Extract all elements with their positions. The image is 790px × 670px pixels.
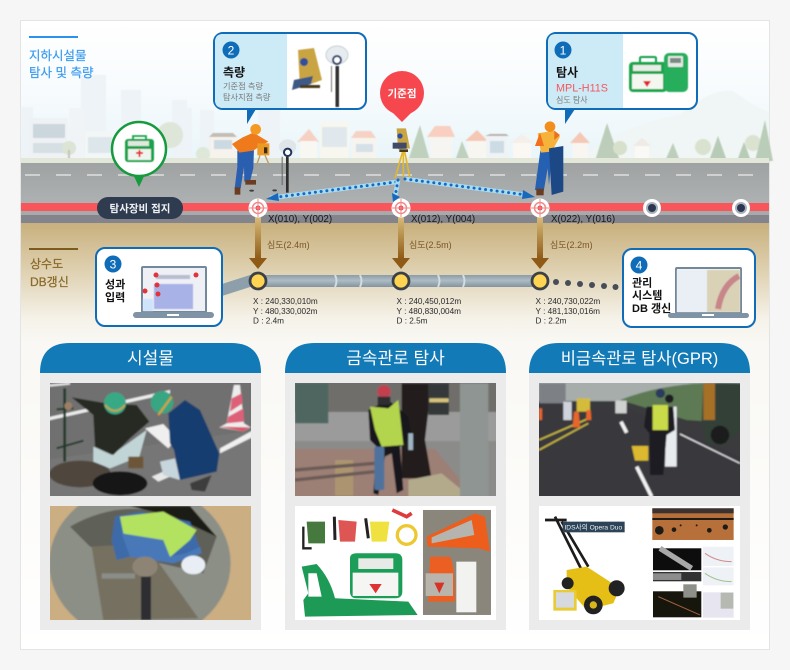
coordinates 1: D : 2.4m — [253, 316, 284, 326]
coordinates 2: X : 240,450,012m — [396, 297, 461, 306]
depth shaft 3 — [531, 216, 549, 269]
coordinates 2: Y : 480,830,004m — [396, 307, 461, 316]
pin: equipment — [112, 122, 166, 187]
section title: survey: 지하시설물 — [29, 49, 87, 63]
callout 2 description: 기준점 측량 — [223, 81, 263, 91]
coordinates 3: D : 2.2m — [536, 316, 567, 326]
coordinates 1 — [253, 297, 318, 326]
panel header: facilities: 시설물 — [127, 349, 174, 368]
panel header: facilities — [40, 343, 261, 373]
callout 3 title: 성과 — [105, 277, 125, 291]
icon: laptop with map — [133, 266, 214, 318]
photo: workers at manhole — [50, 383, 251, 496]
callout 4 title: DB 갱신 — [632, 302, 671, 315]
callout 1 title: 탐사 — [556, 66, 578, 80]
pipe node 1 — [250, 273, 266, 289]
road lane dashes — [25, 174, 769, 176]
section title: survey — [29, 37, 94, 80]
marker: point 1 — [248, 198, 268, 218]
dark road base — [21, 215, 769, 223]
step number 1: 1 — [560, 44, 567, 58]
trees — [62, 120, 773, 163]
pipe node 2 — [393, 273, 409, 289]
label: equipment ground: 탐사장비 접지 — [110, 202, 170, 215]
section title: DB update: 상수도 — [30, 257, 63, 271]
coordinates 1: X : 240,330,010m — [253, 297, 318, 306]
photo: GPR equipment and results: IDS사의 Opera Duo — [564, 522, 622, 531]
coordinates 2: D : 2.5m — [396, 316, 428, 326]
panel header: metal pipe: 금속관로 탐사 — [346, 349, 445, 368]
section title: DB update — [29, 249, 78, 289]
step number 3: 3 — [110, 258, 117, 272]
pin: reference point — [380, 71, 424, 122]
depth shaft 1 — [249, 216, 267, 269]
coordinates 3: Y : 481,130,016m — [536, 307, 600, 316]
depth label 3: 심도(2.2m) — [550, 240, 593, 250]
photo: metal detector equipment — [295, 506, 496, 620]
step number 2: 2 — [228, 44, 235, 58]
coordinates 1: Y : 480,330,002m — [253, 307, 318, 316]
step number 1 — [554, 42, 572, 58]
callout 1: detection — [547, 33, 697, 124]
panel: facilities — [40, 343, 261, 642]
model name: MPL-H11S — [556, 82, 608, 94]
callout 4 title: 시스템 — [632, 289, 662, 302]
callout 3 title: 입력 — [105, 291, 125, 304]
photo: worker in manhole — [50, 506, 251, 620]
callout 4 title — [632, 276, 671, 315]
city skyline — [21, 75, 769, 163]
pipe node 3 — [532, 273, 548, 289]
panel header: GPR — [529, 343, 750, 373]
depth label 2: 심도(2.5m) — [409, 240, 452, 250]
panel header: metal pipe — [285, 343, 506, 373]
photo: GPR on road — [539, 383, 740, 496]
ground — [21, 223, 769, 343]
detector operator — [535, 121, 563, 195]
icon: green detector kit — [629, 53, 688, 92]
callout 3 title — [105, 277, 125, 304]
panel: metal pipe detection — [285, 343, 506, 630]
road — [21, 163, 769, 203]
sky — [21, 21, 769, 164]
photo: surveyor on sidewalk — [295, 383, 496, 496]
lower page wash — [21, 343, 769, 649]
icon: detector kit — [125, 136, 154, 162]
panel header: GPR: 비금속관로 탐사(GPR) — [561, 349, 718, 368]
kerb strip — [21, 211, 769, 216]
reference tripod — [393, 128, 410, 178]
survey arrows — [266, 179, 535, 202]
grid label 3: X(022), Y(016) — [551, 214, 615, 225]
step number 2 — [222, 42, 240, 58]
callout 2 description — [223, 81, 271, 102]
icon: laptop with GIS — [668, 267, 749, 318]
coordinates 3 — [536, 297, 600, 326]
depth shaft 2 — [392, 216, 410, 269]
callout 2 title: 측량 — [223, 66, 245, 80]
pin: reference point: 기준점 — [388, 87, 416, 100]
section title: survey: 탐사 및 측량 — [29, 66, 94, 80]
pending pipe dots — [553, 279, 618, 290]
icon: total station and GPS — [292, 46, 348, 107]
marker: point 2 — [392, 198, 410, 218]
step number 4: 4 — [636, 258, 643, 272]
grass strip — [21, 158, 769, 164]
coordinates 3: X : 240,730,022m — [536, 297, 600, 306]
grid label 2: X(012), Y(004) — [411, 214, 475, 225]
panel: non-metal pipe detection — [529, 343, 750, 630]
callout 2 description: 탐사지점 측량 — [223, 92, 271, 102]
marker: pending point 5 — [732, 199, 750, 217]
depth label 1: 심도(2.4m) — [267, 240, 310, 250]
marker: point 3 — [530, 198, 550, 218]
grid label 1: X(010), Y(002) — [268, 214, 332, 225]
callout 4 title: 관리 — [632, 276, 652, 290]
marker: pending point 4 — [643, 199, 661, 217]
surveyor with GPS pole — [232, 124, 296, 195]
callout 2: survey — [214, 33, 366, 124]
callout 4: management system — [623, 249, 755, 327]
section title: DB update: DB갱신 — [30, 275, 69, 289]
photo: GPR equipment and results — [539, 506, 740, 620]
houses — [209, 122, 651, 162]
label: equipment ground — [97, 197, 183, 219]
water pipe — [222, 275, 540, 296]
callout 3: result entry — [96, 248, 222, 326]
coordinates 2 — [396, 297, 461, 326]
red survey line — [21, 203, 769, 211]
callout 1 description: 심도 탐사 — [556, 94, 588, 104]
